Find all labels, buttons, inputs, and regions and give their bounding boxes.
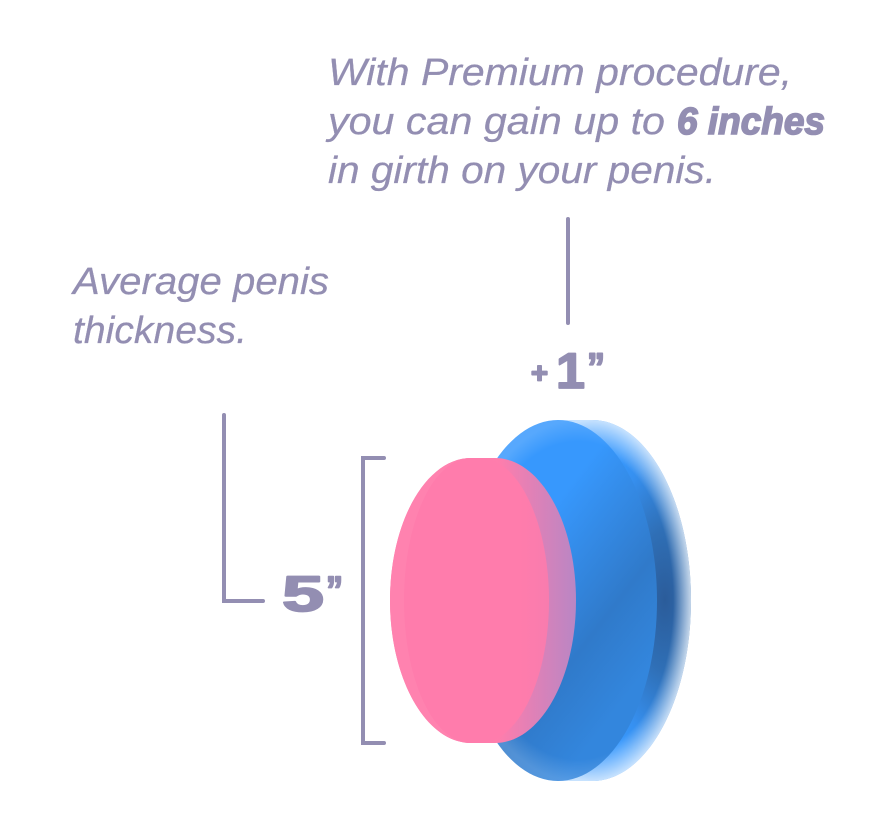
leader line: plus one inch	[566, 219, 570, 323]
caption: premium procedure: With Premium procedure,	[328, 52, 792, 94]
caption: average thickness	[71, 261, 329, 352]
caption: average thickness: thickness.	[73, 310, 247, 352]
label: plus one inch: 1	[556, 343, 585, 399]
label: five inches: 5	[282, 566, 324, 622]
label: five inches	[282, 566, 343, 622]
bracket: five inch height	[363, 458, 384, 743]
caption: average thickness: Average penis	[71, 261, 329, 303]
pink lighter left edge	[390, 458, 471, 743]
pink disc face	[404, 458, 549, 743]
blue disc rim	[558, 420, 691, 781]
caption: premium procedure: in girth on your penis.	[328, 150, 716, 192]
blue face edge highlight	[459, 420, 657, 781]
blue rim edge fade	[558, 420, 691, 781]
pink disc side	[390, 458, 576, 743]
diagram: pink average girth disc	[390, 458, 576, 743]
leader line: average thickness	[224, 415, 263, 601]
label: plus one inch: +	[531, 358, 548, 390]
label: plus one inch: ”	[587, 346, 605, 390]
diagram: blue enlarged girth disc	[459, 420, 691, 781]
caption: premium procedure: 6 inches	[677, 101, 825, 143]
caption: premium procedure: you can gain up to	[325, 101, 665, 143]
label: plus one inch	[531, 343, 605, 399]
blue disc face	[459, 420, 657, 781]
label: five inches: ”	[326, 570, 343, 612]
caption: premium procedure	[325, 52, 825, 192]
